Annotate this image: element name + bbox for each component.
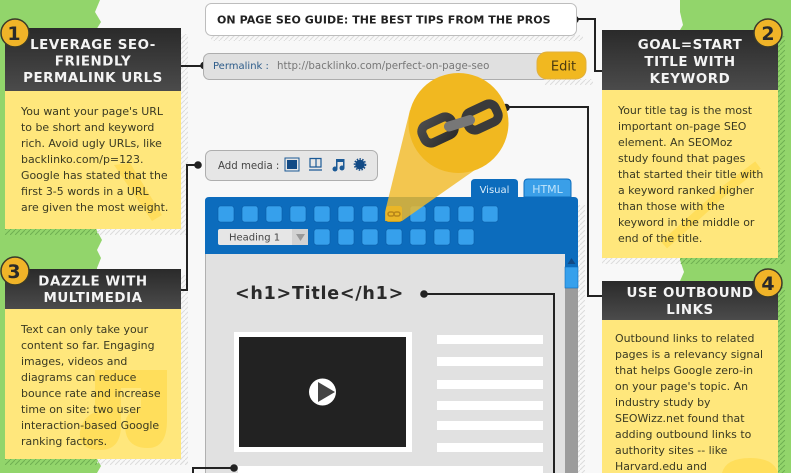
panel 2 text: important on-page SEO	[618, 120, 746, 133]
panel 3 text: images, videos and	[21, 355, 127, 368]
panel 2 text: Your title tag is the most	[617, 104, 753, 117]
title box	[206, 4, 576, 36]
editor tabs	[471, 179, 571, 197]
panel 4 text: authority sites -- like	[615, 444, 728, 457]
panel 1 text: to be short and keyword	[21, 121, 154, 134]
panel 2 heading: TITLE WITH	[644, 55, 736, 70]
editor content area	[205, 254, 578, 473]
panel 2 heading: KEYWORD	[650, 72, 730, 87]
icon: music	[332, 159, 344, 172]
panel 1 heading: PERMALINK URLS	[23, 71, 163, 86]
edit button: Edit	[551, 60, 576, 74]
connector dots	[194, 16, 579, 169]
small chain icon on toolbar	[388, 212, 400, 216]
editor toolbar	[205, 197, 578, 254]
panel 3 text: time on site: two user	[21, 403, 141, 416]
permalink label: Permalink :	[213, 61, 269, 72]
scrollbar	[565, 254, 578, 473]
title: ON PAGE SEO GUIDE: THE BEST TIPS FROM THE PROS	[217, 14, 551, 26]
highlighted toolbar button	[386, 206, 402, 222]
connector dots over content	[230, 290, 428, 472]
panel 3 header	[5, 269, 181, 309]
heading dropdown	[218, 229, 308, 245]
video player	[234, 332, 412, 452]
panel 1 text: are given the most weight.	[21, 201, 168, 214]
connector lines	[181, 19, 602, 296]
badge 4: 4	[761, 273, 775, 295]
panel 1 header	[5, 28, 181, 91]
panel 4 heading: USE OUTBOUND	[626, 286, 754, 301]
panel 4 text: pages is a relevancy signal	[615, 348, 763, 361]
icon: gear	[354, 159, 366, 170]
panel 4 text: Outbound links to related	[615, 332, 754, 345]
panel 4 text: Harvard.edu and	[615, 460, 707, 473]
panel 4 body	[602, 320, 778, 473]
panel 4 text: that helps Google zero-in	[615, 364, 753, 377]
panel 4 text: on your page's topic. An	[615, 380, 748, 393]
badge 3	[1, 257, 29, 285]
badge 4	[754, 269, 782, 297]
permalink bar	[204, 52, 586, 80]
panel 3 heading: DAZZLE WITH	[38, 274, 148, 290]
panel 2 text: study found that pages	[618, 152, 746, 165]
panel 1 body	[5, 91, 181, 229]
icon: chain link	[419, 102, 501, 145]
panel 2 header	[602, 30, 778, 90]
toolbar buttons row 1	[218, 206, 498, 222]
icon: image	[285, 158, 299, 171]
edit button	[537, 52, 586, 79]
add media bar	[206, 150, 378, 180]
badge 2	[754, 19, 782, 47]
panel 2 body	[602, 90, 778, 258]
panel 1: permalink URLs	[1, 19, 181, 229]
visual tab: Visual	[480, 185, 509, 196]
connector lines over content	[193, 294, 554, 473]
panel 1 text: You want your page's URL	[20, 105, 164, 118]
panel 4 text: adding outbound links to	[615, 428, 752, 441]
panel 3 text: content so far. Engaging	[21, 339, 155, 352]
panel 3 heading: MULTIMEDIA	[43, 291, 143, 306]
panel 1 text: rich. Avoid ugly URLs, like	[21, 137, 162, 150]
panel 2 text: end of the title.	[618, 232, 702, 245]
panel 2 text: than those with the	[618, 200, 725, 213]
toolbar buttons row 2	[314, 229, 474, 245]
panel 4 watermark	[722, 458, 778, 473]
magnifier cone	[385, 110, 492, 221]
panel 2 text: that started their title with	[618, 168, 763, 181]
right green background	[680, 0, 791, 473]
badge 1: 1	[7, 23, 21, 45]
panel 1 text: first 3-5 words in a URL	[21, 185, 149, 198]
panel 2 heading: GOAL=START	[638, 38, 743, 53]
panel 4: outbound links	[602, 269, 782, 473]
panel 4 header	[602, 281, 778, 320]
panel 2 text: element. An SEOMoz	[618, 136, 733, 149]
badge 1	[1, 19, 29, 47]
panel 1 text: Google has stated that the	[21, 169, 168, 182]
magnifier circle	[408, 73, 508, 173]
panel 4 heading: LINKS	[666, 303, 714, 318]
badge 3: 3	[7, 261, 21, 283]
text lines	[238, 335, 543, 473]
panel 2 text: a keyword ranked higher	[618, 184, 754, 197]
panel 3 text: diagrams can reduce	[21, 371, 137, 384]
panel 1 text: backlinko.com/p=123.	[21, 153, 143, 166]
panel 3 text: bounce rate and increase	[21, 387, 161, 400]
h1 title: <h1>Title</h1>	[235, 284, 404, 304]
panel 2 text: keyword in the middle or	[618, 216, 755, 229]
panel 3 watermark: music note	[80, 370, 167, 450]
panel 4 text: SEOWizz.net found that	[615, 412, 745, 425]
panel 4 text: industry study by	[615, 396, 711, 409]
badge 2: 2	[761, 23, 775, 45]
panel 2 watermark: key	[664, 165, 758, 245]
panel 3 body	[5, 309, 181, 459]
panel 2: title keyword	[602, 19, 782, 258]
left green background	[0, 0, 102, 473]
html tab: HTML	[532, 183, 564, 196]
add media label: Add media :	[218, 161, 279, 172]
heading dropdown: Heading 1	[229, 232, 280, 244]
panel 3 text: ranking factors.	[21, 435, 107, 448]
panel 3 text: Text can only take your	[20, 323, 149, 336]
panel 1 heading: LEVERAGE SEO-	[30, 38, 156, 53]
permalink url: http://backlinko.com/perfect-on-page-seo	[277, 60, 489, 72]
panel 3 text: interaction-based Google	[21, 419, 159, 432]
panel 1 watermark	[114, 163, 162, 221]
icon: gallery	[309, 158, 322, 170]
panel 1 heading: FRIENDLY	[55, 54, 131, 70]
panel 3: multimedia	[1, 257, 181, 459]
